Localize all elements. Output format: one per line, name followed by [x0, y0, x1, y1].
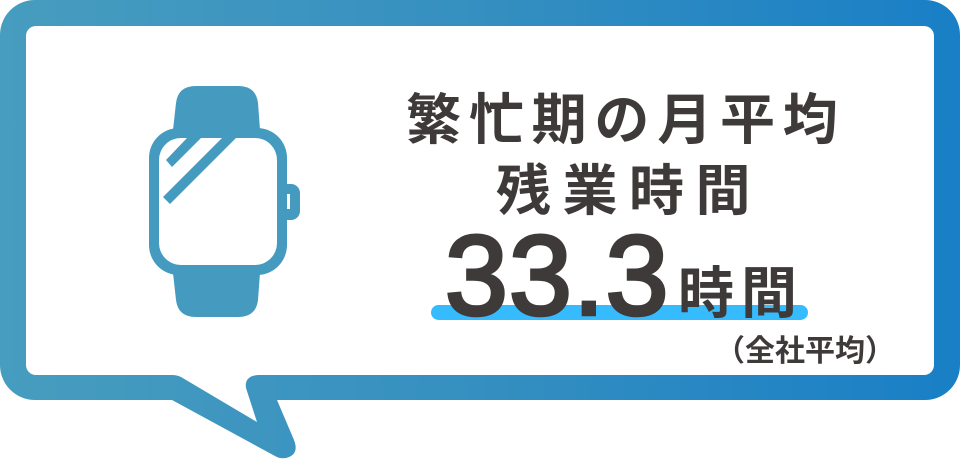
heading line 1: 繁忙期の月平均: [406, 89, 846, 151]
unit: hours: 時間: [678, 262, 804, 325]
watch top band: [173, 86, 260, 130]
note: company average: （全社平均）: [715, 335, 895, 368]
glass reflection lines: [163, 138, 236, 204]
value: 33.3: 33.3: [445, 212, 670, 338]
watch case: [149, 128, 287, 275]
icon: smartwatch: [149, 86, 300, 317]
watch bottom band: [173, 273, 260, 317]
highlight underline: [431, 305, 808, 320]
watch crown: [287, 184, 300, 220]
heading line 2: 残業時間: [496, 160, 762, 222]
